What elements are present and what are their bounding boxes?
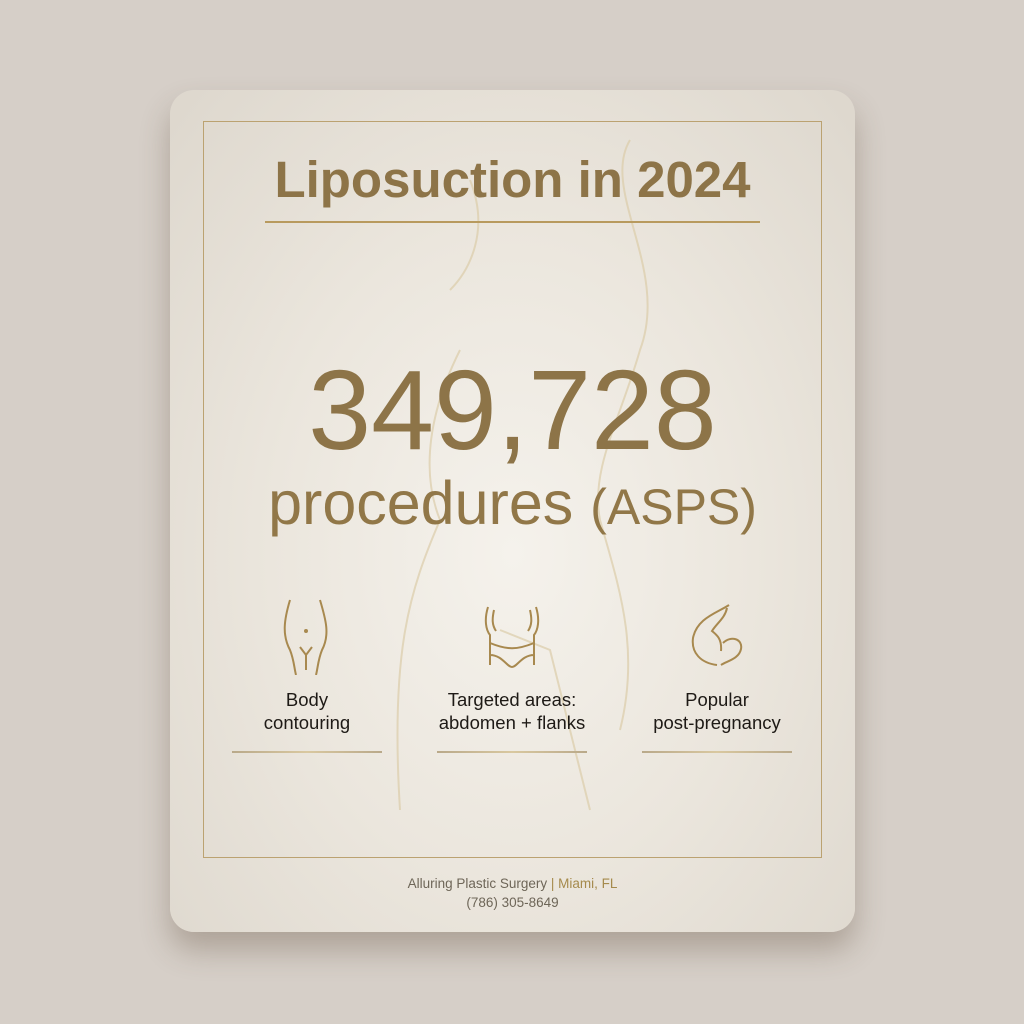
label: post-pregnancy — [653, 712, 781, 733]
label: abdomen + flanks — [439, 712, 585, 733]
footer: Alluring Plastic Surgery | Miami, FL — [408, 876, 617, 891]
label — [439, 689, 585, 733]
footer — [408, 876, 617, 910]
label: contouring — [264, 712, 350, 733]
label: Body — [286, 689, 328, 710]
icon: mother — [692, 604, 742, 666]
item: body contouring — [232, 600, 382, 753]
item: targeted areas — [437, 606, 587, 753]
subtitle: procedures (ASPS) — [268, 469, 757, 537]
item: post-pregnancy — [642, 604, 792, 753]
title: Liposuction in 2024 — [274, 151, 751, 208]
card — [170, 90, 855, 932]
label — [264, 689, 350, 733]
icon: waist — [484, 606, 540, 668]
title underline — [265, 221, 760, 222]
icon: body — [284, 600, 328, 675]
label — [653, 689, 781, 733]
footer: (786) 305-8649 — [466, 895, 559, 910]
frame — [203, 121, 822, 858]
label: Targeted areas: — [448, 689, 576, 710]
body silhouette — [396, 140, 648, 810]
label: Popular — [685, 689, 749, 710]
big number: 349,728 — [308, 347, 717, 473]
